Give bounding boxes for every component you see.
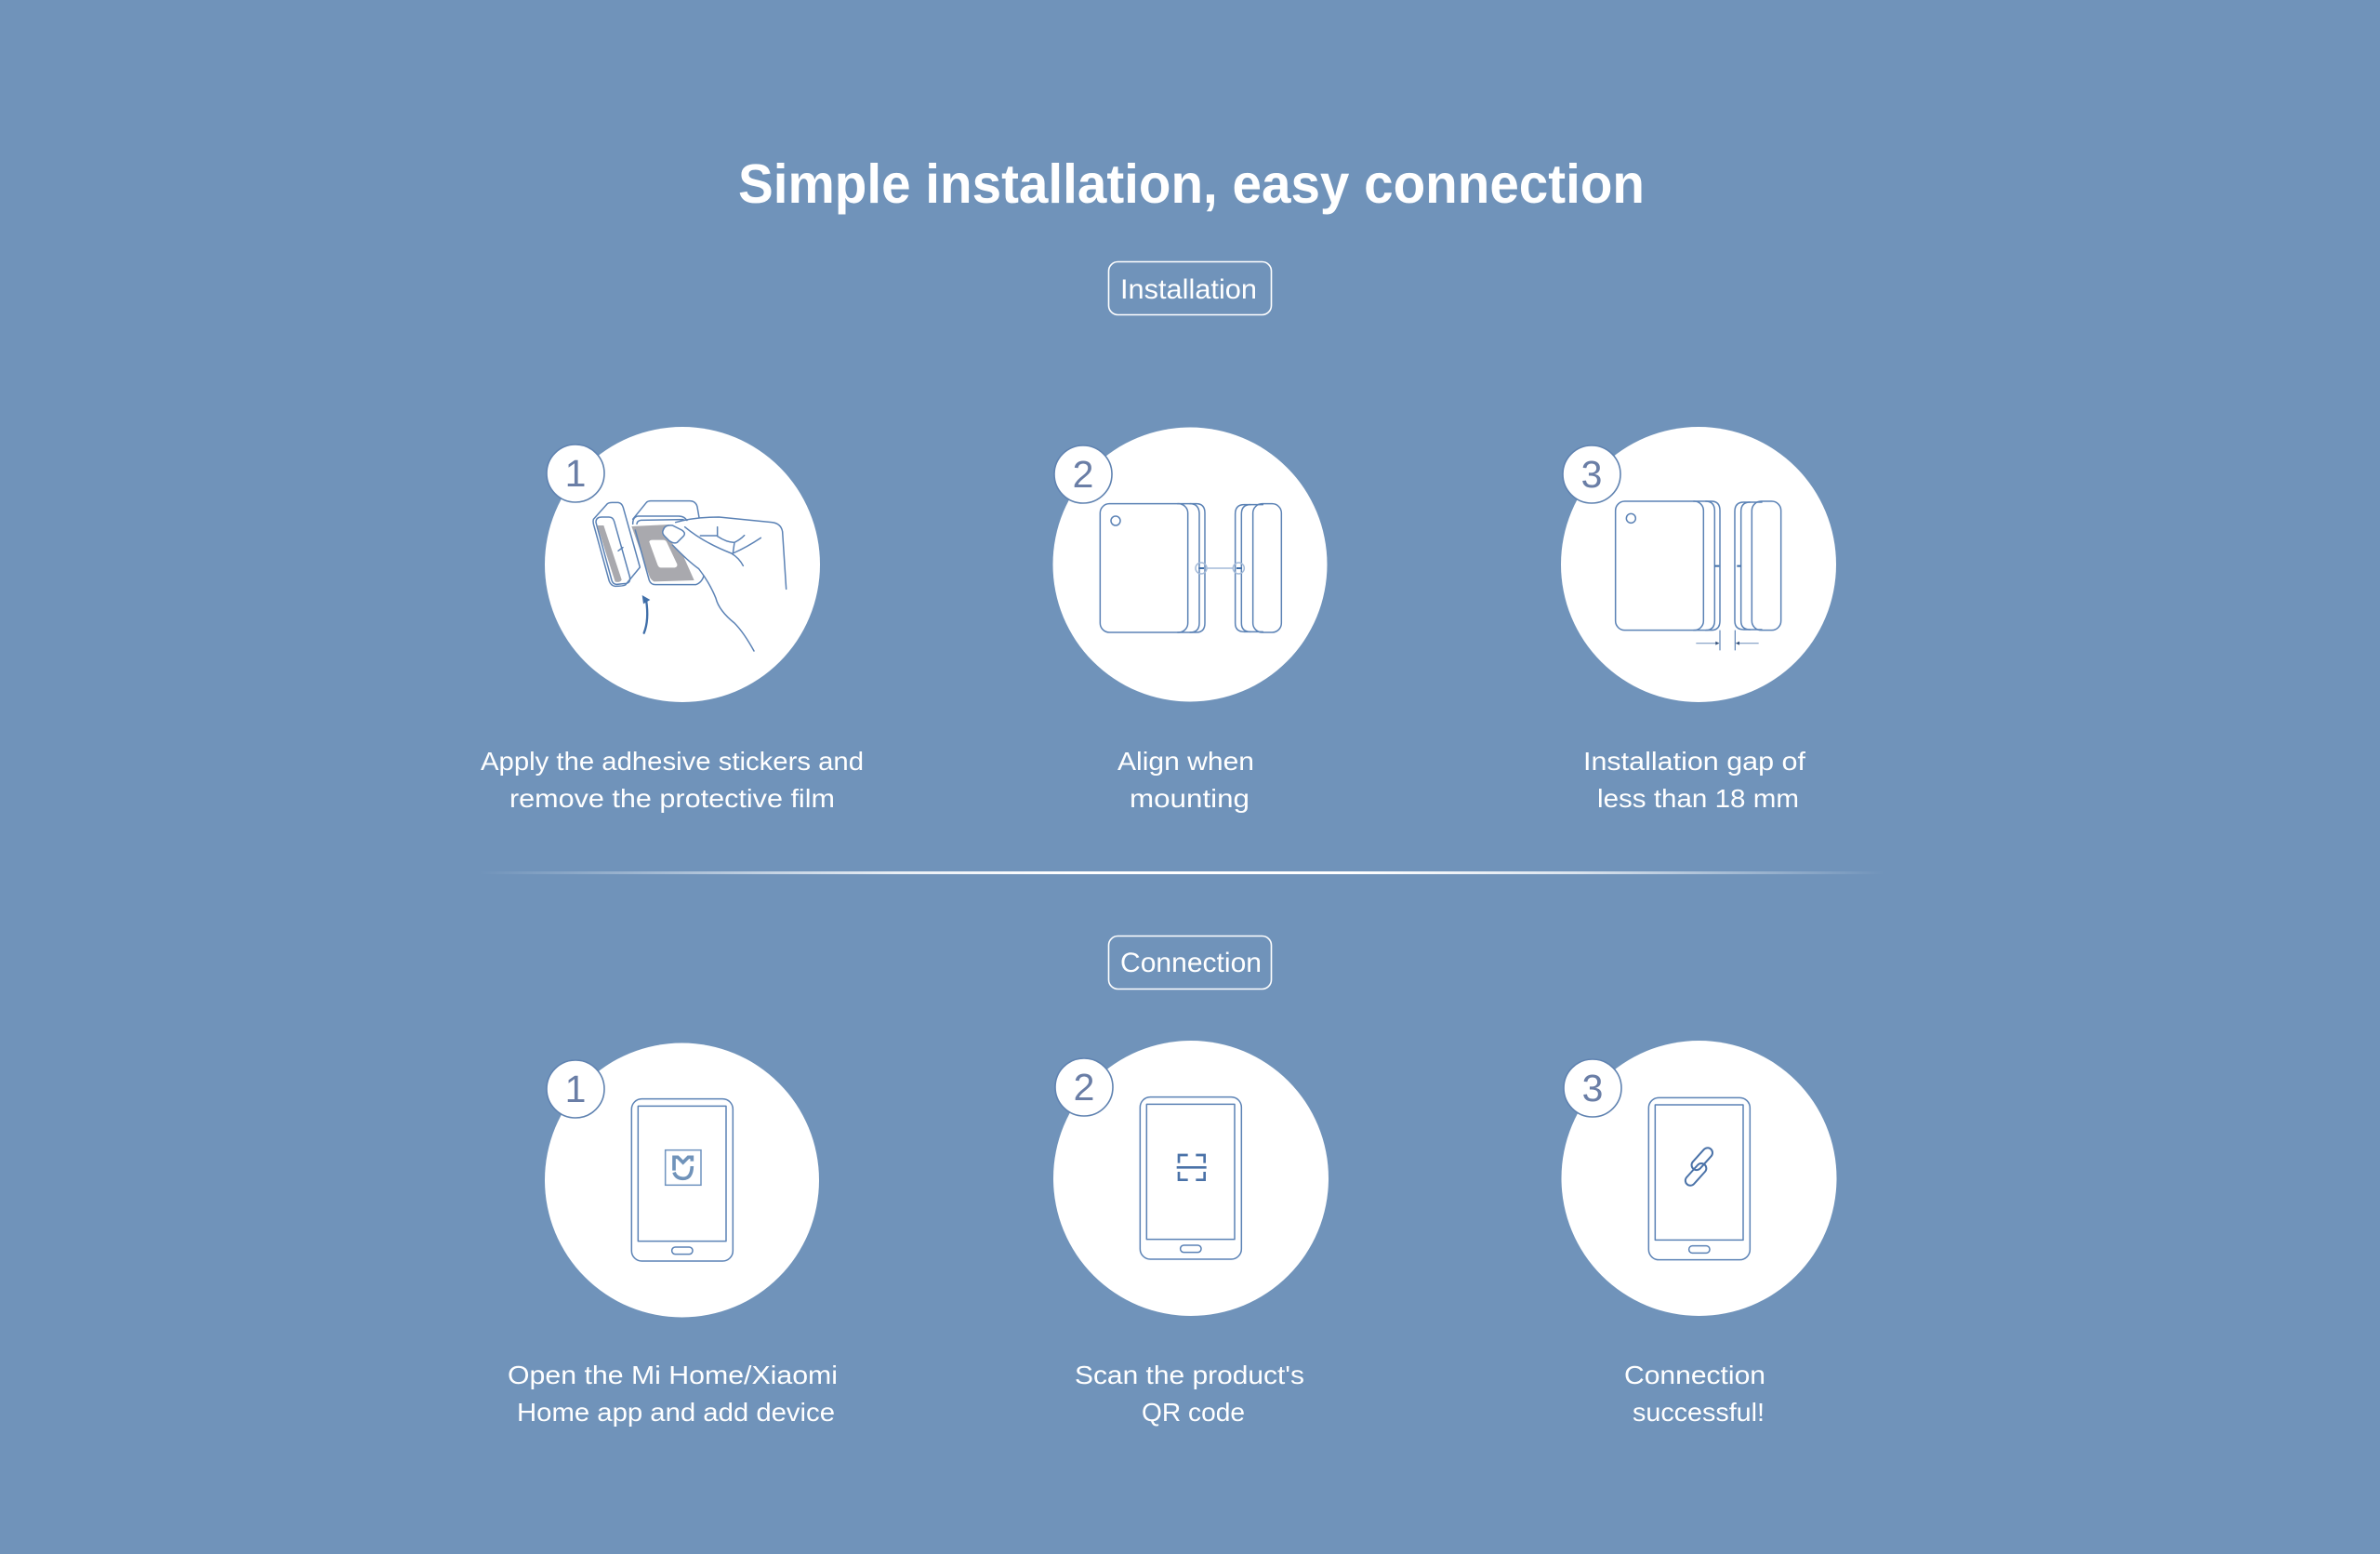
- number badge 1: [547, 445, 604, 502]
- caption: connection step 3: successful!: [1633, 1398, 1765, 1427]
- circle: [545, 427, 820, 702]
- circle: [1561, 427, 1836, 702]
- number badge 1: 1: [565, 452, 586, 495]
- caption: connection step 1: Home app and add device: [517, 1398, 835, 1427]
- number badge 2: 2: [1073, 453, 1093, 496]
- number badge 2: 2: [1074, 1066, 1094, 1109]
- number badge 2: [1054, 445, 1112, 503]
- number badge 3: [1564, 1059, 1621, 1117]
- section tag: Connection: [1108, 936, 1272, 990]
- section tag: Installation: [1108, 262, 1272, 314]
- connection step 3: [1562, 1041, 1837, 1316]
- section tag: Connection: Connection: [1120, 948, 1262, 978]
- installation step 1: [545, 427, 820, 702]
- number badge 3: 3: [1581, 453, 1602, 496]
- caption: install step 2: Align when: [1117, 747, 1254, 776]
- circle: [1052, 428, 1328, 701]
- icon: applying adhesive sticker by hand: [593, 501, 787, 651]
- number badge 3: 3: [1582, 1067, 1603, 1109]
- caption: install step 3: less than 18 mm: [1597, 784, 1799, 813]
- caption: connection step 3: Connection: [1624, 1361, 1765, 1389]
- title: Simple installation, easy connection: [738, 153, 1645, 215]
- caption: install step 3: Installation gap of: [1583, 747, 1805, 776]
- caption: connection step 1: Open the Mi Home/Xiaomi: [508, 1361, 838, 1389]
- icon: phone with Mi Home logo: [631, 1099, 733, 1261]
- installation step 2: [1052, 428, 1328, 701]
- number badge 1: 1: [565, 1068, 586, 1110]
- caption: install step 1: remove the protective film: [509, 784, 835, 813]
- caption: install step 1: Apply the adhesive stickers and: [481, 747, 864, 776]
- circle: [1053, 1041, 1329, 1316]
- connection step 2: [1053, 1041, 1329, 1316]
- icon: align sensor and magnet: [1100, 504, 1281, 632]
- connection step 1: [545, 1043, 819, 1317]
- icon: phone with chain link: [1648, 1097, 1750, 1260]
- icon: installation gap dimension: [1616, 501, 1781, 650]
- circle: [1562, 1041, 1837, 1316]
- circle: [545, 1043, 819, 1317]
- section tag: Installation: Installation: [1120, 274, 1257, 305]
- number badge 1: [547, 1060, 604, 1118]
- caption: connection step 2: Scan the product's: [1075, 1361, 1304, 1389]
- installation step 3: [1561, 427, 1836, 702]
- number badge 3: [1563, 445, 1620, 503]
- caption: connection step 2: QR code: [1142, 1398, 1245, 1427]
- caption: install step 2: mounting: [1130, 784, 1250, 813]
- icon: phone with scan frame: [1140, 1097, 1241, 1259]
- number badge 2: [1055, 1058, 1113, 1116]
- section divider: [479, 871, 1884, 874]
